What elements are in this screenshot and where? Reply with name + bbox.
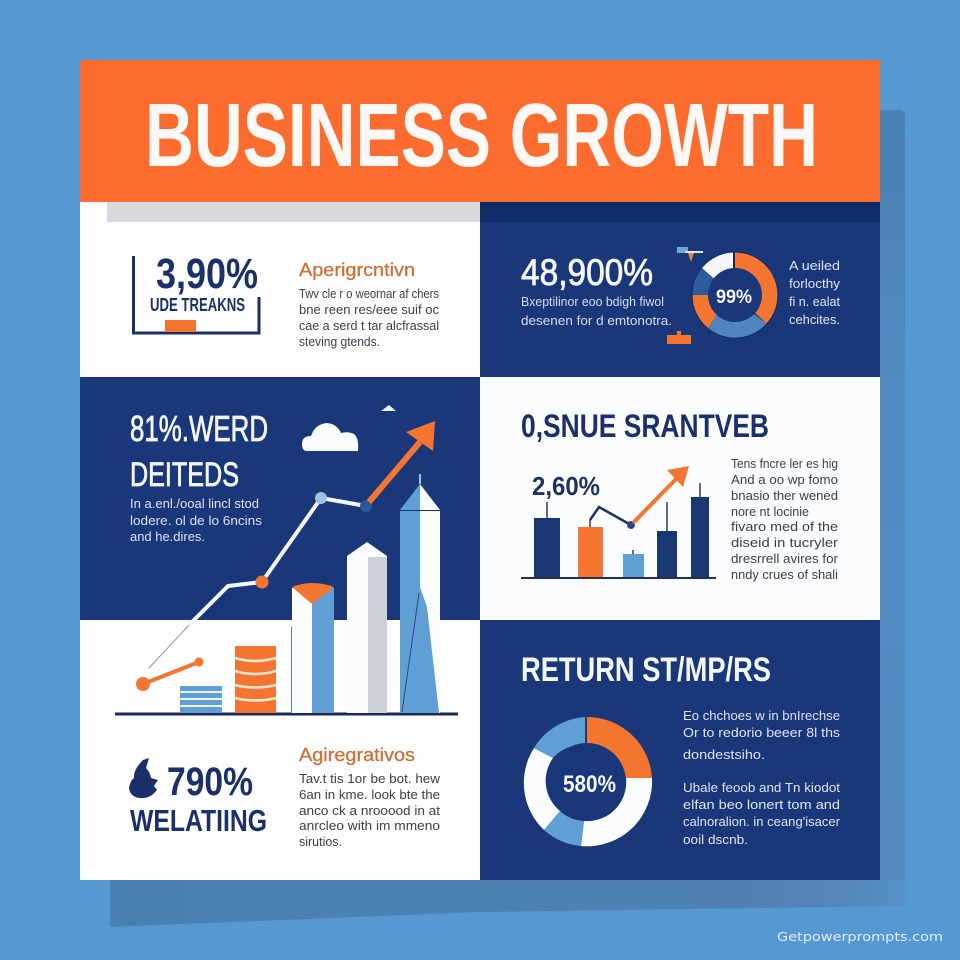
arrow [633, 466, 689, 523]
chart value: 2,60% [532, 471, 600, 501]
panel: middle left navy [80, 377, 480, 620]
body text [130, 497, 262, 544]
side text: A ueiled [789, 258, 840, 273]
body text: lodere. ol de lo 6ncins [130, 514, 262, 528]
body text: dondestsiho. [683, 748, 765, 762]
header banner [80, 60, 880, 202]
tower [400, 474, 440, 713]
panel heading: DEITEDS [130, 456, 239, 494]
body text: sirutios. [299, 835, 342, 849]
card drop shadow [110, 110, 905, 927]
metric value: 790% [167, 760, 253, 804]
body text: Tav.t tis 1or be bot. hew [299, 772, 441, 786]
donut chart [692, 252, 778, 338]
body text [731, 457, 838, 582]
body text: desenen for d emtonotra. [521, 314, 672, 328]
body text: anco ck a nrooood in at [299, 804, 441, 818]
icon: small triangle cloud [381, 405, 396, 411]
metric value: 3,90% [156, 250, 258, 298]
body text: calnoralion. in ceang'isacer [683, 815, 840, 829]
donut value: 580% [563, 771, 616, 798]
side text: fi n. ealat [789, 294, 840, 309]
body text: anrcleo with im mmeno [299, 819, 440, 833]
body text: Or to redorio beeer 8l ths [683, 726, 840, 740]
icon: cloud [302, 423, 358, 451]
panel heading: RETURN ST/MP/RS [521, 651, 771, 689]
body text: dresrrell avires for [731, 552, 838, 566]
body text: Ubale feoob and Tn kiodot [683, 781, 841, 795]
bar chart [521, 466, 716, 579]
body text: And a oo wp fomo [731, 473, 838, 487]
icon: orange base marker [667, 331, 691, 344]
baseline [115, 712, 458, 716]
rising trend line [149, 498, 366, 668]
body text: bne reen res/eee suif oc [299, 303, 439, 317]
orange start segment [136, 658, 204, 691]
body text [521, 295, 672, 328]
body text: cae a serd t tar alcfrassal [299, 319, 439, 333]
subheading: Agiregrativos [299, 745, 415, 765]
body text [683, 709, 841, 847]
metric value: 48,900% [521, 252, 653, 293]
panel heading: 81%.WERD [130, 408, 268, 449]
body text: elfan beo lonert tom and [683, 798, 840, 812]
body text: Tens fncre ler es hig [731, 457, 838, 471]
body text: fivaro med of the [731, 520, 838, 534]
body text: 6an in kme. look bte the [299, 788, 440, 802]
watermark: Getpowerprompts.com [777, 929, 943, 944]
body text: Bxeptilinor eoo bdigh fiwol [521, 295, 664, 309]
blue stacked bar [180, 686, 222, 713]
panel: lower left metric [129, 745, 441, 849]
panel: middle right chart [480, 377, 880, 620]
panel heading [130, 408, 268, 494]
metric label: UDE TREAKNS [150, 295, 245, 315]
trend line [590, 507, 631, 525]
orange stacked bar [235, 646, 276, 713]
side text [789, 258, 841, 327]
bar: white and gray [347, 542, 387, 713]
body text: steving gtends. [299, 335, 380, 349]
orange marker [165, 320, 196, 332]
body text: Eo chchoes w in bnIrechse [683, 709, 840, 723]
panel: bottom right return [480, 620, 880, 880]
panel: top left metric [80, 202, 480, 377]
side text: cehcites. [789, 312, 840, 327]
icon: flag marker [677, 247, 703, 262]
bar: orange top [291, 583, 334, 713]
metric label: WELATIING [130, 803, 267, 838]
panel: top right metric [480, 202, 880, 377]
bracket icon [134, 256, 259, 333]
subheading: Aperigrcntivn [299, 260, 415, 280]
growth chart illustration [115, 421, 458, 716]
body text [299, 287, 439, 349]
donut chart [524, 717, 652, 846]
donut value: 99% [716, 287, 752, 308]
body text: diseid in tucryler [731, 536, 838, 550]
side text: forlocthy [789, 276, 841, 291]
body text [299, 772, 441, 849]
panel: lower left white [80, 620, 480, 880]
body text: nndy crues of shali [731, 568, 838, 582]
body text: bnasio ther wened [731, 489, 838, 503]
orange growth arrow [369, 421, 435, 502]
body text: In a.enl./ooal lincl stod [130, 497, 259, 511]
body text: Twv cle r o weornar af chers [299, 287, 439, 301]
body text: nore nt locinie [731, 505, 809, 519]
body text: ooil dscnb. [683, 833, 748, 847]
icon: navy blob [129, 758, 158, 798]
trend markers [256, 492, 372, 588]
panel heading: 0,SNUE SRANTVEB [521, 408, 769, 444]
body text: and he.dires. [130, 530, 205, 544]
